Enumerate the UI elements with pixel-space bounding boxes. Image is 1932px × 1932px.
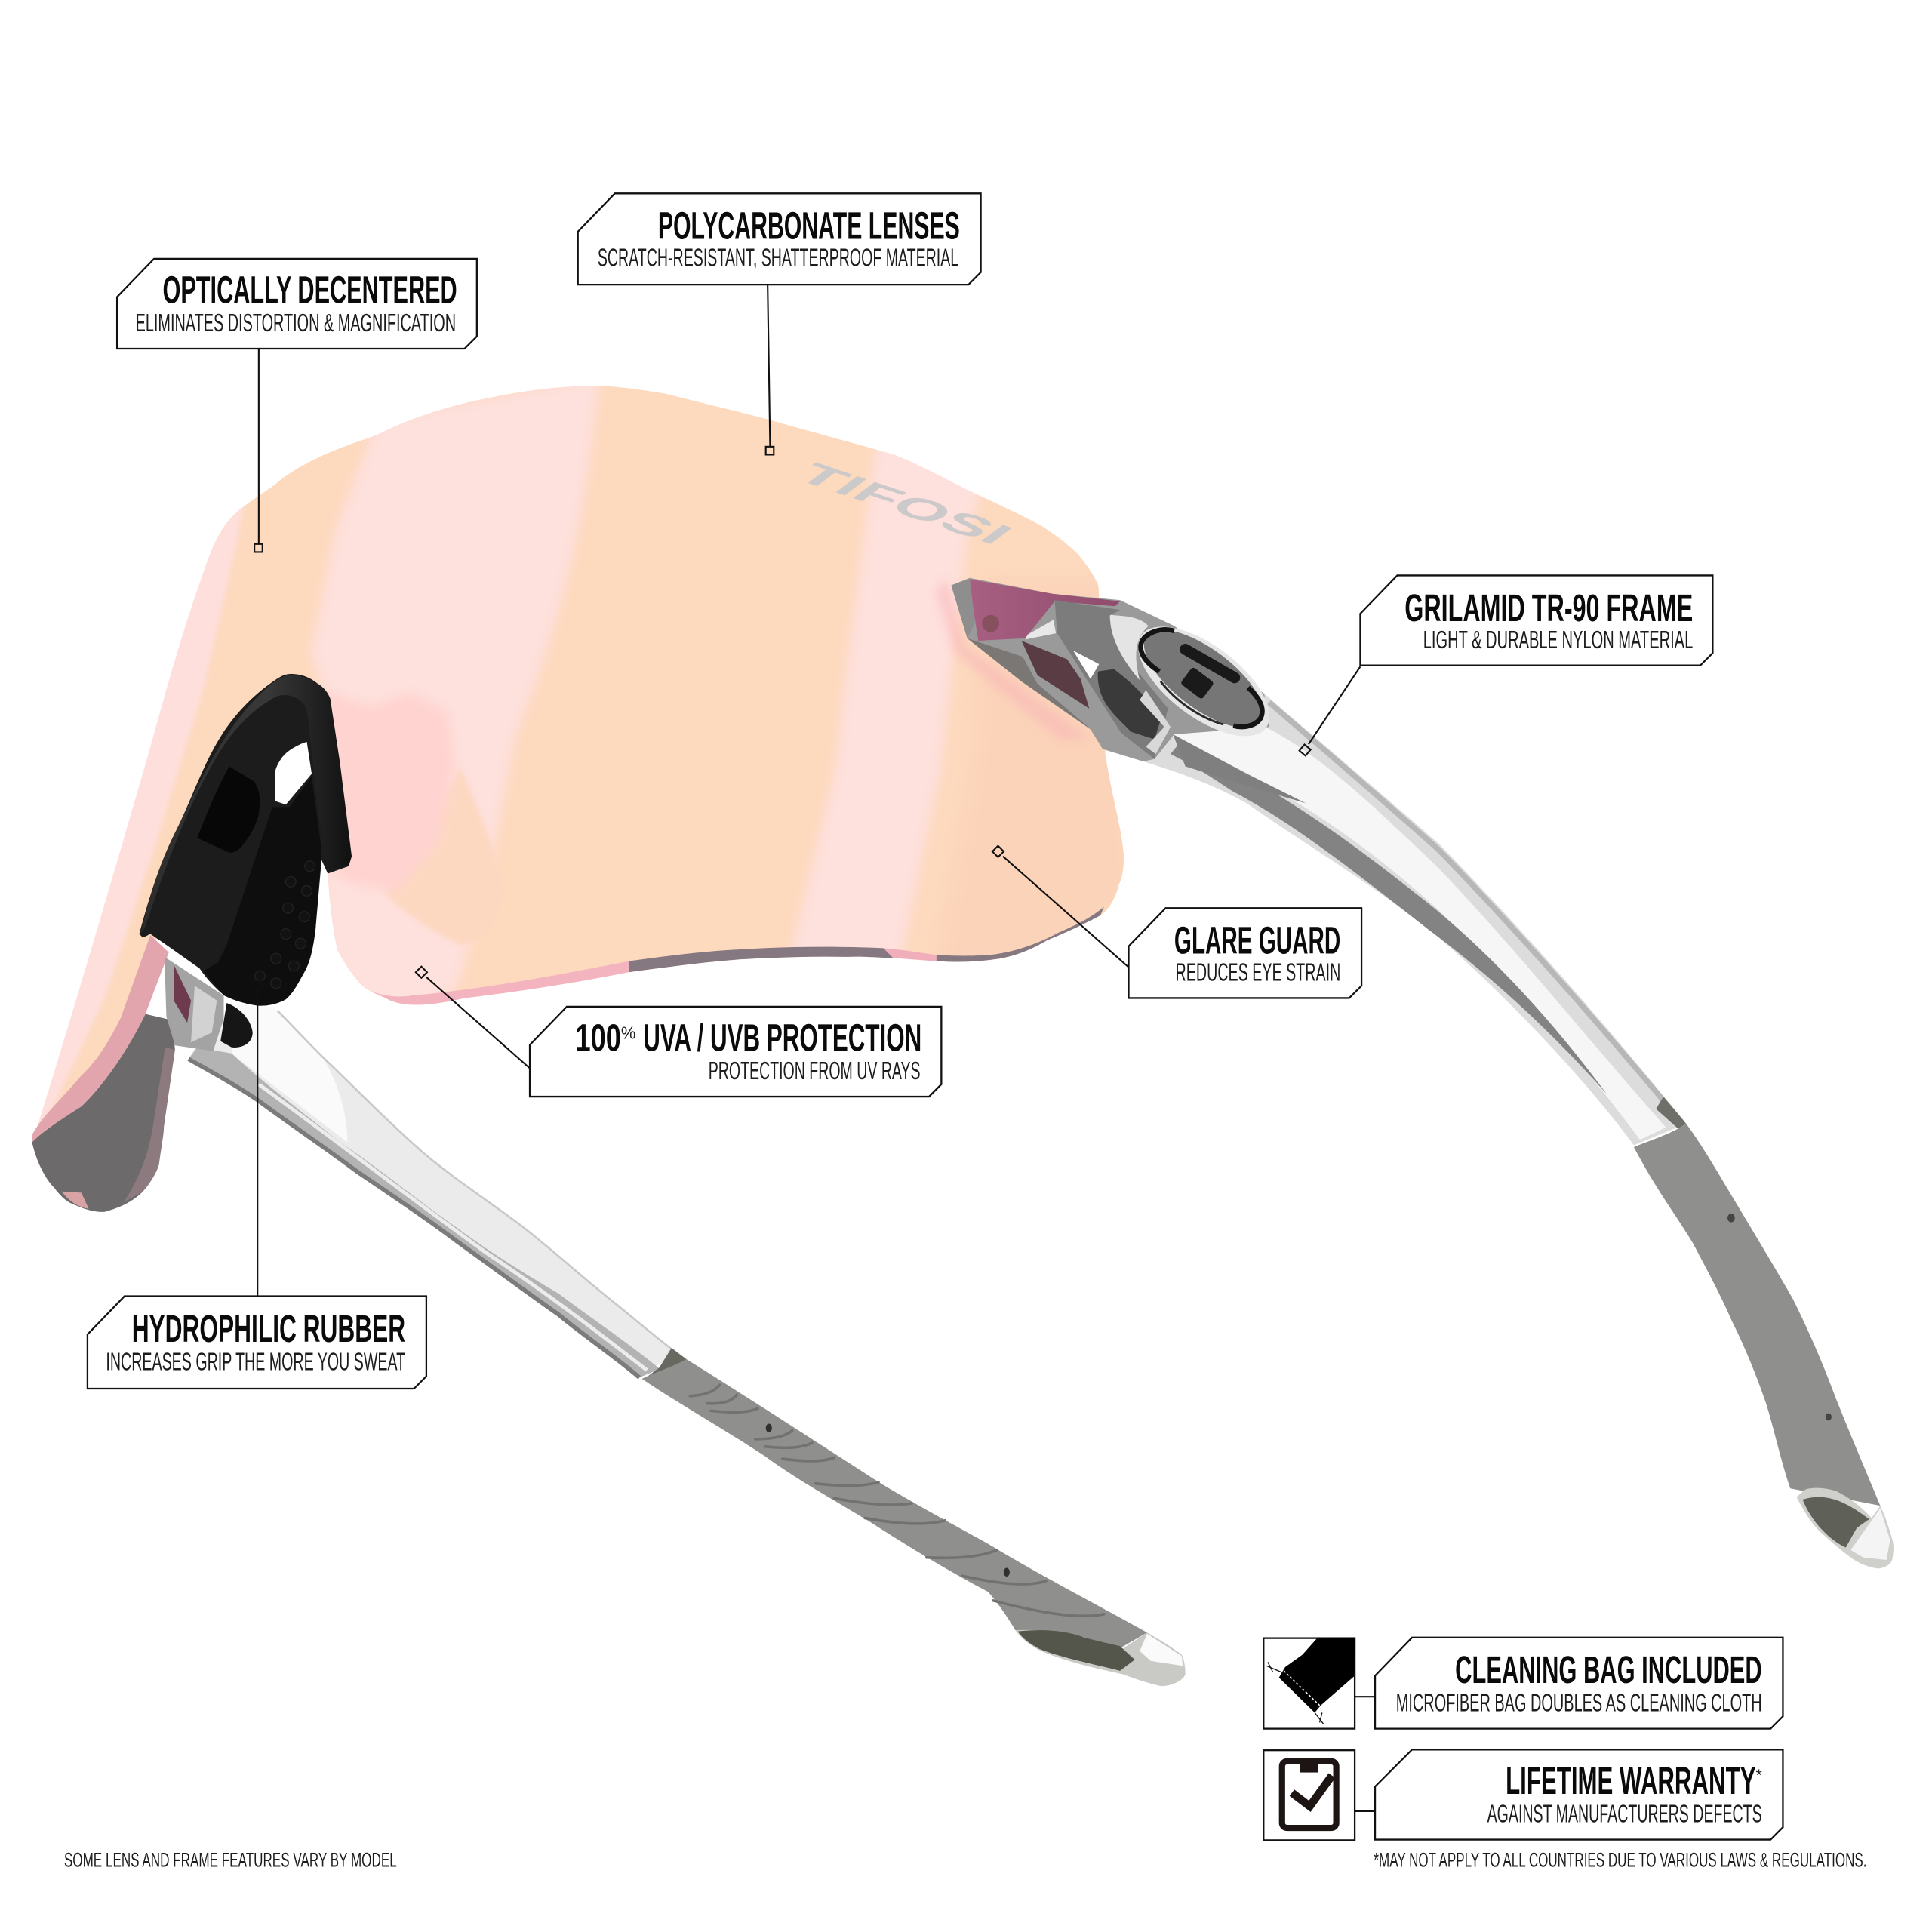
nosepiece perforations <box>255 861 315 989</box>
hinge white wedge <box>1025 620 1056 639</box>
dial face <box>1129 612 1278 746</box>
icon box <box>1263 1750 1355 1840</box>
lower left lens mauve edge <box>123 1048 175 1202</box>
hinge pin <box>982 615 999 632</box>
heading: * <box>1756 1767 1762 1784</box>
hinge lower grey facet <box>968 638 1091 730</box>
description: LIGHT & DURABLE NYLON MATERIAL <box>1423 626 1693 654</box>
right hinge <box>951 578 1287 761</box>
heading: GRILAMID TR-90 FRAME <box>1404 586 1693 629</box>
label box <box>88 1297 426 1389</box>
temple white core <box>1171 715 1666 1140</box>
description: SCRATCH-RESISTANT, SHATTERPROOF MATERIAL <box>598 245 958 272</box>
heading: GLARE GUARD <box>1174 919 1340 962</box>
dial rim right arc <box>1233 688 1262 727</box>
lens bottom right grey rim <box>937 907 1104 961</box>
hinge dark mauve facet <box>1021 641 1089 709</box>
leader line and marker <box>1300 666 1360 755</box>
temple grey band <box>1171 742 1607 1094</box>
connector <box>1355 1696 1375 1697</box>
nosepiece dark patch <box>197 767 260 853</box>
nosepiece divided pad <box>203 777 321 1006</box>
left hinge highlights <box>191 986 217 1042</box>
icon: cleaning bag <box>1266 1638 1355 1724</box>
left pink lens rim <box>32 935 169 1142</box>
lower left lens pink tip <box>62 1192 89 1209</box>
near temple clear section <box>189 1007 676 1377</box>
hinge white window <box>1073 651 1099 679</box>
leader line and marker <box>416 967 530 1069</box>
heading: LIFETIME WARRANTY <box>1506 1759 1756 1802</box>
near temple collar <box>645 1348 686 1379</box>
nose peach blob <box>386 767 501 945</box>
heading: UVA / UVB PROTECTION <box>643 1017 921 1060</box>
icon: clipboard with check <box>1282 1761 1337 1828</box>
footnote: model variation: SOME LENS AND FRAME FEATURES VARY BY MODEL <box>64 1848 397 1871</box>
far temple arm <box>1143 626 1894 1568</box>
lens logo: TIFOSI <box>786 457 1023 551</box>
near temple lower stripes <box>189 1048 660 1377</box>
label box <box>578 193 981 285</box>
description: REDUCES EYE STRAIN <box>1176 959 1340 987</box>
far grip <box>1634 1124 1880 1506</box>
left hinge <box>165 957 253 1051</box>
connector <box>1355 1810 1375 1812</box>
dial rim lower line <box>1161 681 1223 724</box>
hinge white facet <box>1110 615 1149 680</box>
label box <box>1375 1749 1783 1840</box>
far right tint <box>968 580 1124 961</box>
lens <box>0 357 1146 1212</box>
hinge clear cap <box>1055 600 1168 759</box>
temple dial <box>1120 606 1287 757</box>
near tip highlight <box>1140 1634 1183 1666</box>
callout: grilamid frame <box>1300 575 1712 755</box>
heading <box>575 1017 921 1060</box>
black nosepiece <box>139 674 352 1006</box>
right hinge body <box>951 578 1269 761</box>
nose pink blob <box>331 696 451 891</box>
label box <box>1129 908 1361 998</box>
callout: cleaning bag <box>1263 1638 1783 1729</box>
callout: optically decentered <box>117 259 477 552</box>
dial rim left arc <box>1140 629 1174 672</box>
left hinge black cushion <box>220 1003 253 1048</box>
heading: HYDROPHILIC RUBBER <box>132 1307 405 1350</box>
hinge pink part <box>970 579 1120 641</box>
label box <box>1375 1638 1783 1729</box>
leader line and marker <box>254 349 263 552</box>
dial square <box>1180 666 1214 700</box>
label box <box>530 1007 941 1097</box>
lens bottom right pink rim <box>884 948 937 961</box>
near temple dark edge <box>189 1059 639 1377</box>
hinge glow <box>937 579 1091 740</box>
label box <box>117 259 477 349</box>
leader line and marker <box>992 846 1129 968</box>
hinge clear strut <box>1140 690 1171 754</box>
dial bar <box>1186 649 1235 678</box>
near grip <box>642 1359 1147 1651</box>
temple end collar <box>1656 1097 1686 1129</box>
leader line and marker <box>254 981 261 1297</box>
far tip dark recess <box>1803 1497 1869 1548</box>
pale pink band left <box>310 376 598 1023</box>
far grip holes <box>1727 1214 1832 1420</box>
heading: 100 <box>575 1017 621 1060</box>
near grip holes <box>766 1424 1010 1577</box>
callout: hydrophilic rubber <box>88 981 426 1389</box>
dial light surround <box>1120 606 1287 757</box>
near tip dark recess <box>1018 1630 1135 1671</box>
hinge front grey facet <box>951 579 974 638</box>
near temple upper edge <box>277 1011 676 1353</box>
callout: polycarbonate lenses <box>578 193 981 454</box>
heading <box>1506 1759 1762 1802</box>
heading: OPTICALLY DECENTERED <box>163 269 457 312</box>
near temple tip <box>1015 1630 1186 1686</box>
nosepiece rim highlight <box>140 675 351 934</box>
main lens body with tint bands <box>38 386 1124 1126</box>
temple band shadow near hinge <box>1173 734 1306 803</box>
left hinge mauve sliver <box>174 964 191 1023</box>
pale pink band right <box>787 431 986 968</box>
icon box <box>1263 1638 1355 1729</box>
near temple white core <box>232 1004 347 1142</box>
nosepiece outer body <box>139 674 352 1006</box>
far tip highlight <box>1850 1508 1890 1560</box>
description: ELIMINATES DISTORTION & MAGNIFICATION <box>136 309 456 337</box>
nosepiece white gap <box>275 742 312 804</box>
near temple arm <box>189 1004 1186 1686</box>
near grip ridges <box>690 1385 1104 1616</box>
description: PROTECTION FROM UV RAYS <box>709 1057 921 1085</box>
label box <box>1360 575 1712 666</box>
callout: glare guard <box>992 846 1361 998</box>
lens peach base <box>38 386 1124 1126</box>
callout: lifetime warranty <box>1263 1749 1783 1840</box>
left outer pink edge <box>38 506 245 1126</box>
temple upper edge shade <box>1269 703 1682 1122</box>
leader line and marker <box>766 285 774 454</box>
heading: POLYCARBONATE LENSES <box>658 205 960 248</box>
lens bottom grey rim <box>629 947 894 972</box>
hinge black cushion <box>1098 669 1161 740</box>
lower left dark lens section <box>32 1014 175 1212</box>
description: INCREASES GRIP THE MORE YOU SWEAT <box>106 1349 405 1377</box>
lens bottom pink rim <box>370 961 629 1004</box>
near temple light stripe <box>259 1084 647 1371</box>
temple clear section <box>1143 626 1686 1146</box>
callout: uv protection <box>416 967 941 1097</box>
left hinge crystal body <box>165 957 223 1051</box>
far temple tip <box>1796 1488 1894 1568</box>
heading: % <box>621 1023 635 1042</box>
